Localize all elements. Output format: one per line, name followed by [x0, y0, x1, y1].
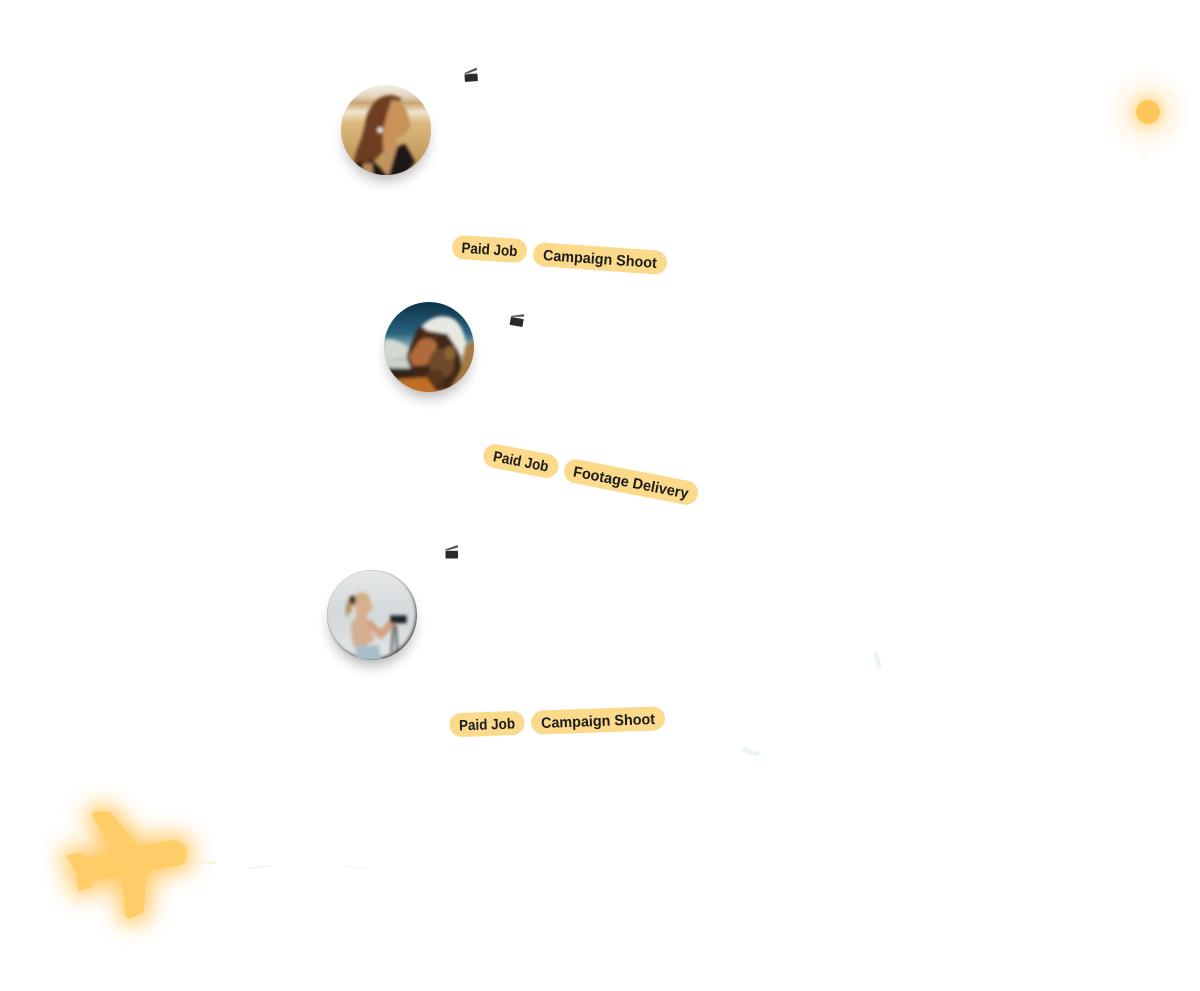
tag: Paid Job: [481, 442, 561, 480]
tag: Paid Job: [451, 235, 528, 263]
tag: Campaign Shoot: Campaign Shoot: [541, 711, 655, 732]
avatar: woman in profile: [337, 82, 437, 180]
avatar: man in white headscarf: [380, 298, 480, 397]
tag: Campaign Shoot: [532, 242, 668, 275]
avatar: woman with camera: [323, 567, 423, 665]
sun marker with glow: [1103, 67, 1193, 157]
tag: Footage Delivery: Footage Delivery: [572, 463, 690, 503]
clapperboard icon 2: [510, 312, 525, 327]
tag: Paid Job: Paid Job: [461, 240, 518, 260]
clapperboard icon 3: [445, 545, 458, 558]
faint flight path remnants: [68, 150, 1145, 869]
tag: Paid Job: Paid Job: [492, 448, 550, 476]
tag: Campaign Shoot: Campaign Shoot: [542, 247, 657, 272]
clapperboard icon 1: [464, 68, 478, 82]
tag: Campaign Shoot: [531, 706, 665, 735]
plane icon with glow: [67, 812, 186, 918]
tag: Paid Job: [449, 711, 525, 737]
tag: Paid Job: Paid Job: [459, 716, 515, 734]
